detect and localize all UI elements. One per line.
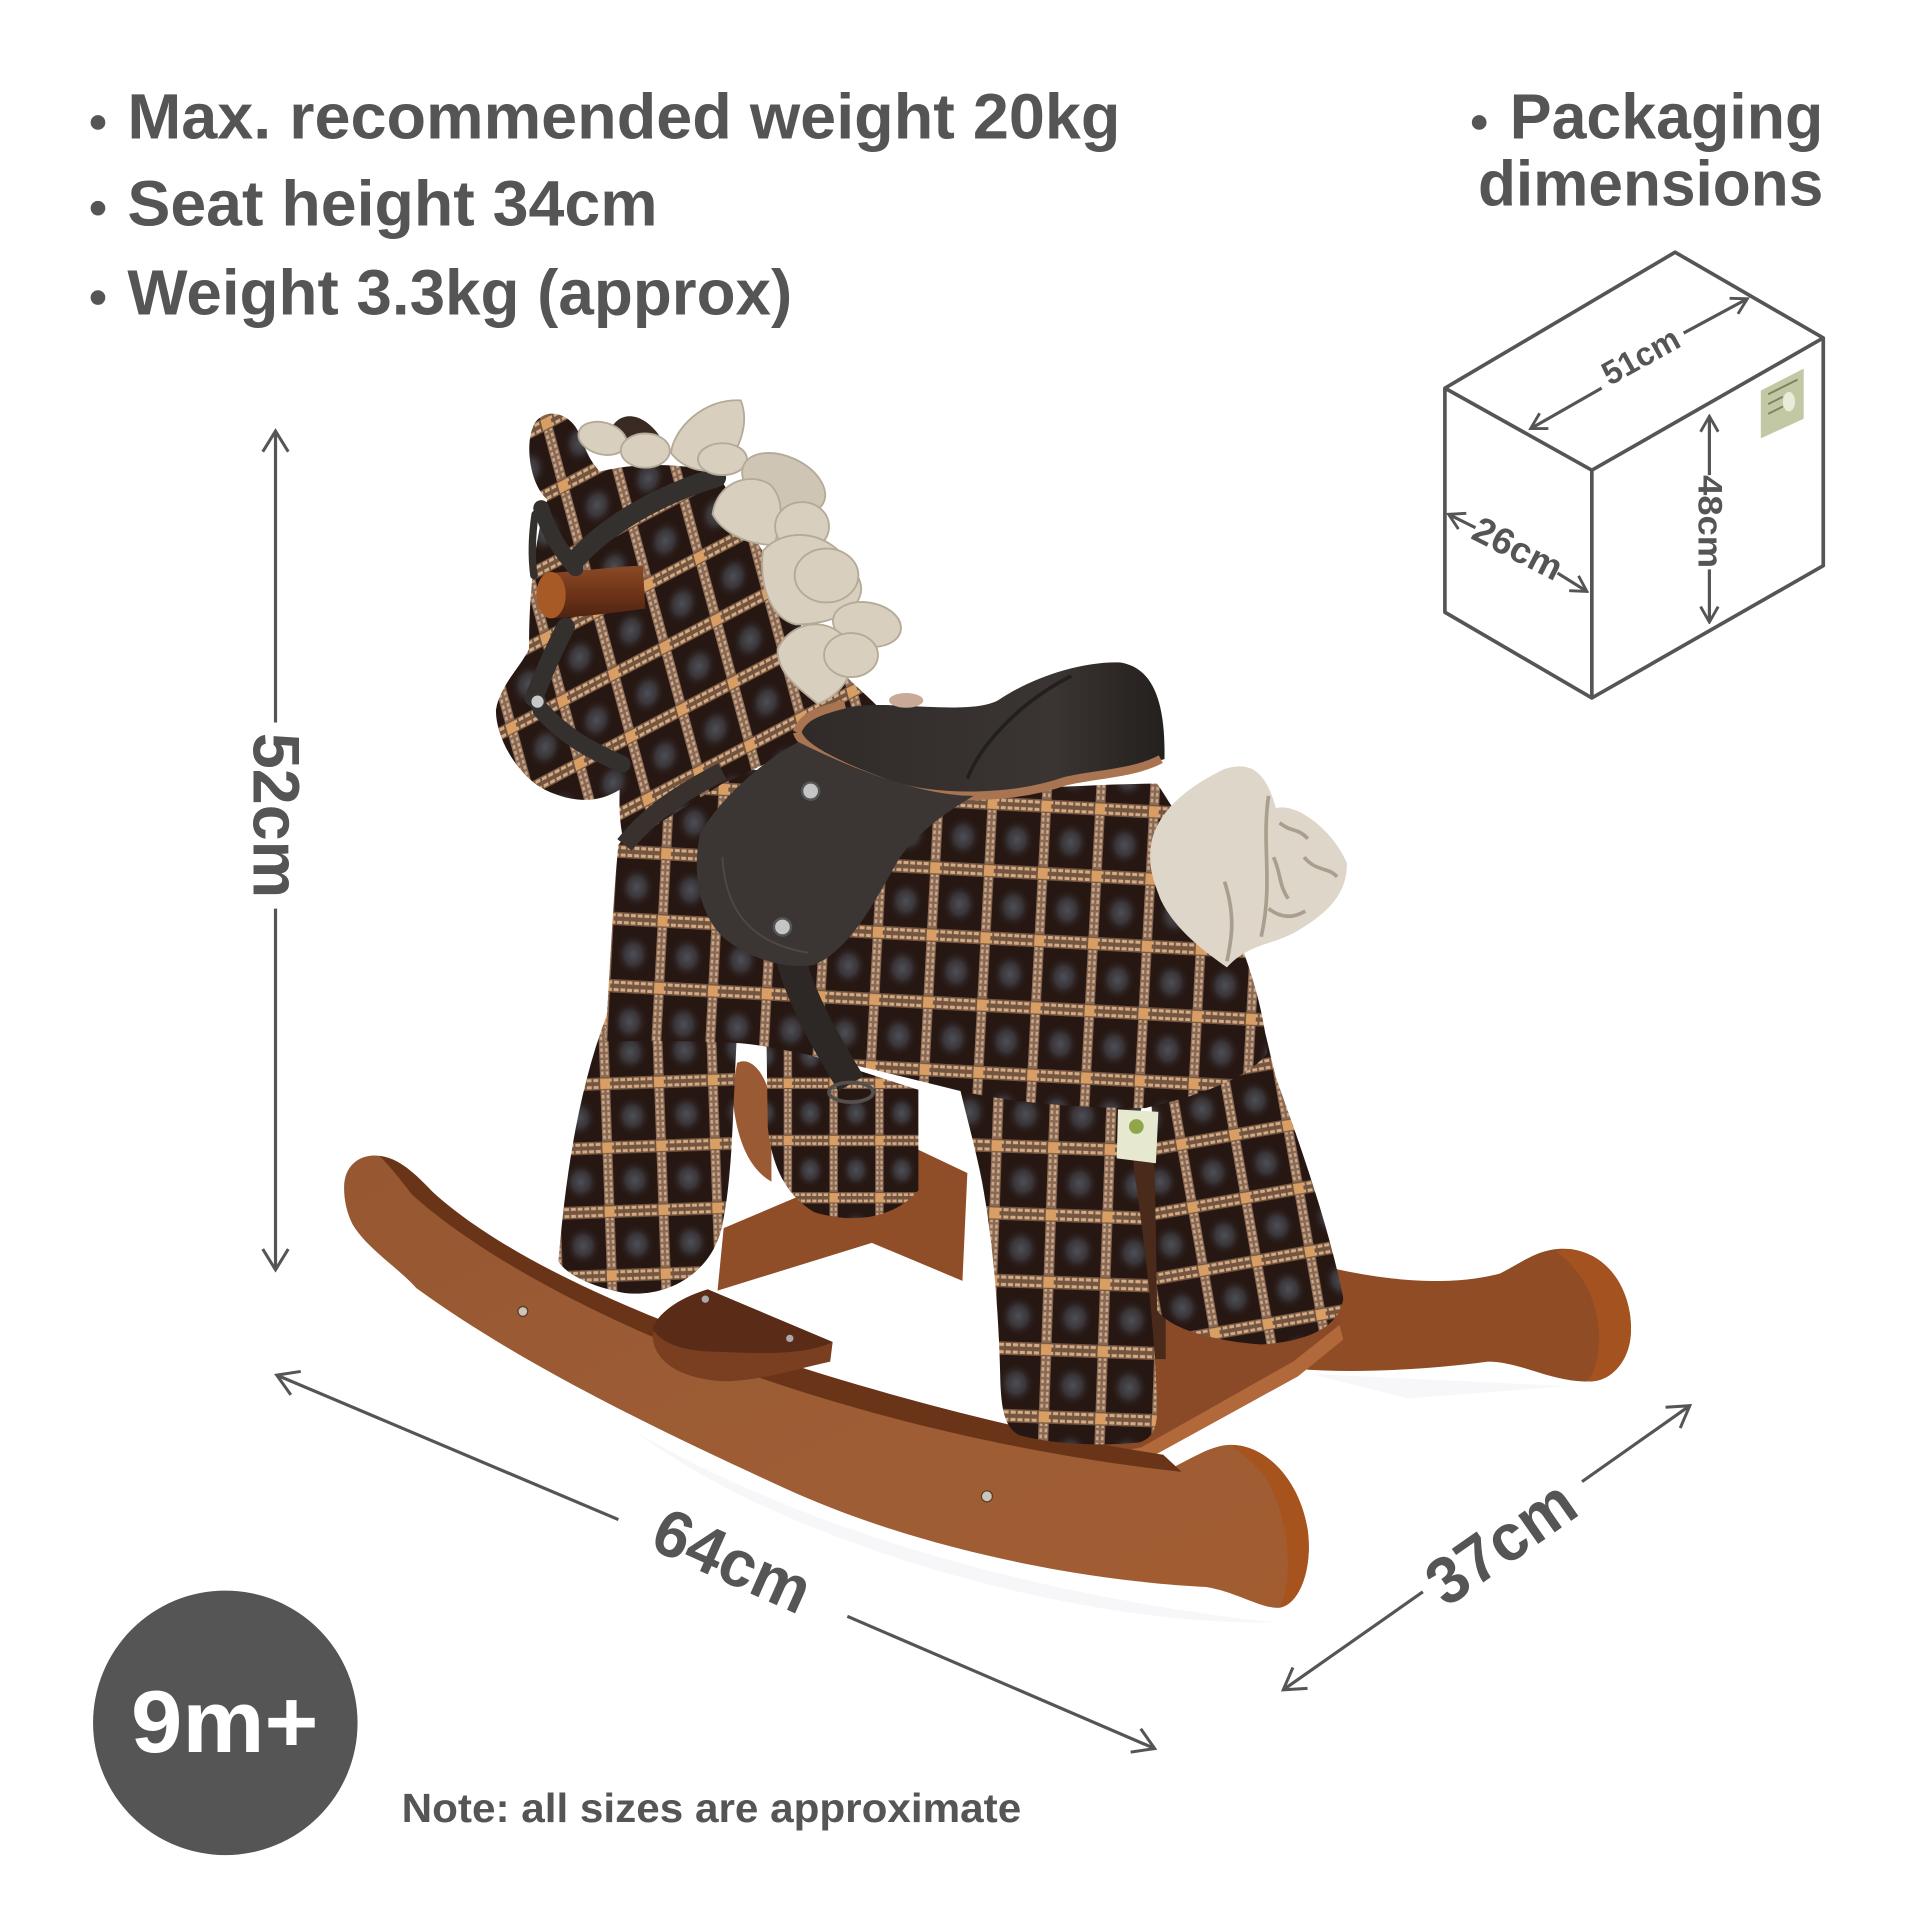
packaging heading: Packaging [1510,81,1823,152]
tail ruffles [1269,823,1337,916]
dimension: height 52cm: 52cm [238,733,312,898]
dimension: length 64cm: 64cm [642,1494,823,1629]
saddle flap stitching [722,857,808,953]
dimension: width 37cm: 37cm [1412,1465,1590,1621]
packaging heading: dimensions [1478,149,1823,220]
girth buckle [829,1082,873,1102]
mane tuft [889,693,923,708]
bridle ring [530,694,545,709]
mane [575,400,905,704]
age badge [93,1591,358,1855]
back rocker [732,1061,1631,1381]
girth strap [790,955,851,1084]
saddle rivets [802,782,819,800]
dimension: 51cm: 51cm [1596,320,1686,393]
dimension: 26cm: 26cm [1466,509,1570,588]
far front leg [767,1041,918,1218]
specification list [91,81,1120,329]
dimension: 51cm [1531,299,1747,429]
saddle piping [797,732,1161,796]
packaging box diagram [1445,252,1823,698]
box outline [1445,252,1823,698]
age badge: 9m+ [131,1672,318,1771]
tail [1150,766,1347,967]
saddle [697,662,1165,966]
dimension: width 37cm [1283,1406,1690,1690]
head and neck [496,414,882,845]
packaging heading [1472,81,1823,220]
front rocker [344,1156,1309,1608]
box label [1761,369,1804,438]
bridle straps [532,478,716,764]
footrest [653,1289,833,1381]
spec: max weight: Max. recommended weight 20kg [127,81,1120,152]
spec: weight: Weight 3.3kg (approx) [127,258,792,329]
note: Note: all sizes are approximate [402,1785,1021,1831]
wooden handle [536,566,645,618]
saddle flap [697,742,973,966]
near front leg [558,1010,737,1294]
dimension: length 64cm [277,1375,1155,1749]
far ear [610,416,661,453]
dimension: 48cm: 48cm [1690,475,1728,568]
floor shadow [637,1374,1567,1623]
near back leg [959,1084,1157,1444]
breast strap [624,771,722,845]
spec: seat height: Seat height 34cm [127,168,658,239]
rocking horse illustration [344,400,1631,1623]
rocker screws [518,1307,992,1502]
product tag [1117,1109,1158,1163]
cross bars [718,1150,1343,1457]
far back leg [1151,1016,1343,1344]
saddle seat [796,662,1165,797]
body [605,765,1267,1108]
wood between back legs [1120,1151,1166,1359]
